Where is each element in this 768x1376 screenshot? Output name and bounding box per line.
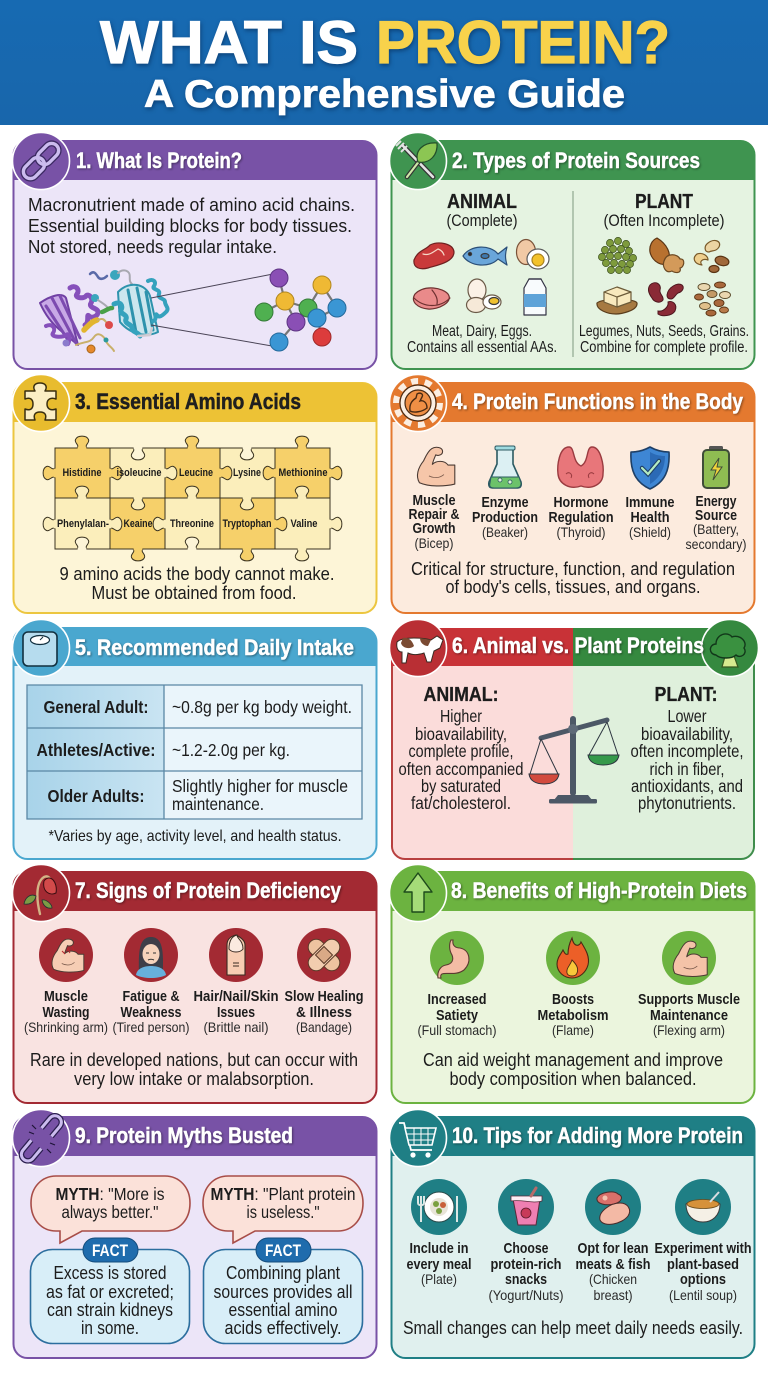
animal heading bbox=[446, 190, 518, 230]
tip: include in every meal: Include in bbox=[410, 1240, 468, 1257]
sign: fatigue: (Tired person) bbox=[112, 1019, 190, 1035]
protein ribbon illustration bbox=[40, 270, 168, 353]
sign: fatigue: Weakness bbox=[120, 1004, 182, 1021]
tip: include in every meal: every meal bbox=[406, 1256, 472, 1273]
sign: slow healing bbox=[284, 928, 364, 1035]
tip: protein-rich snacks bbox=[488, 1179, 564, 1303]
fact 2 box: sources provides all bbox=[214, 1282, 352, 1302]
benefit: supports muscle bbox=[638, 931, 740, 1038]
function: immune health bbox=[626, 447, 674, 540]
benefit: supports muscle: Maintenance bbox=[650, 1007, 728, 1024]
amino acid puzzle: Threonine bbox=[170, 518, 214, 530]
animal column: fat/cholesterol. bbox=[411, 793, 511, 813]
sign: hair nail skin: Issues bbox=[217, 1004, 255, 1021]
function: muscle repair: Muscle bbox=[412, 492, 456, 509]
tip: include in every meal bbox=[406, 1179, 472, 1287]
animal column: by saturated bbox=[421, 776, 501, 796]
tip: lean meats: Opt for lean bbox=[578, 1240, 648, 1257]
intake table bbox=[27, 685, 362, 819]
panel: 10 tips for adding more protein bbox=[390, 1110, 755, 1358]
animal caption bbox=[407, 323, 557, 356]
function: immune health: Immune bbox=[626, 494, 674, 511]
amino acid puzzle: Keaine bbox=[124, 518, 152, 530]
sign: slow healing: (Bandage) bbox=[296, 1019, 352, 1035]
icon: puzzle piece bbox=[12, 374, 70, 432]
function: muscle repair: (Bicep) bbox=[414, 535, 454, 551]
intake table: ~1.2-2.0g per kg. bbox=[172, 740, 290, 760]
panel: 3 essential amino acids bbox=[12, 374, 377, 613]
plant heading bbox=[604, 190, 724, 230]
sign: fatigue: Fatigue & bbox=[122, 988, 180, 1005]
fact 1 box: as fat or excreted; bbox=[46, 1282, 174, 1302]
function: hormone regulation: Regulation bbox=[548, 509, 614, 526]
plant column bbox=[630, 683, 744, 813]
sign: fatigue bbox=[112, 928, 190, 1035]
heading: 2. Types of Protein Sources bbox=[452, 148, 700, 173]
sign: muscle wasting bbox=[24, 928, 108, 1035]
column divider bbox=[572, 191, 574, 357]
intake table: General Adult: bbox=[44, 697, 148, 717]
animal caption: Meat, Dairy, Eggs. bbox=[432, 323, 532, 340]
intake table: Athletes/Active: bbox=[36, 740, 156, 760]
amino acid puzzle: Valine bbox=[290, 518, 318, 530]
plant heading: PLANT bbox=[635, 190, 693, 213]
myth 2 bubble bbox=[203, 1176, 363, 1243]
title: PROTEIN? bbox=[376, 9, 670, 76]
animal heading: (Complete) bbox=[446, 211, 518, 230]
icon: eggs bbox=[466, 279, 501, 312]
icon: raw meat slices bbox=[413, 288, 450, 309]
icon: milk carton bbox=[524, 279, 546, 315]
sign: muscle wasting: Wasting bbox=[42, 1004, 90, 1021]
benefit: boosts metabolism: (Flame) bbox=[552, 1022, 594, 1038]
description text: Essential building blocks for body tissues. bbox=[28, 215, 352, 236]
fact 2 box: acids effectively. bbox=[224, 1318, 342, 1338]
sign: muscle wasting: Muscle bbox=[44, 988, 88, 1005]
myth 1 bubble: MYTH: "More is bbox=[56, 1184, 165, 1204]
animal column: ANIMAL: bbox=[424, 683, 498, 706]
animal column: Higher bbox=[440, 706, 482, 726]
amino acid puzzle: Histidine bbox=[62, 467, 102, 479]
connector lines bbox=[151, 274, 273, 346]
title bbox=[100, 9, 670, 76]
title: WHAT IS bbox=[100, 9, 358, 76]
plant column: antioxidants, and bbox=[631, 776, 743, 796]
subtitle: A Comprehensive Guide bbox=[144, 73, 625, 116]
sign: slow healing: Slow Healing bbox=[284, 988, 364, 1005]
function: hormone regulation: Hormone bbox=[554, 494, 608, 511]
tip: plant-based options bbox=[654, 1179, 752, 1303]
function: immune health: (Shield) bbox=[629, 524, 671, 540]
sign: hair nail skin bbox=[194, 928, 278, 1035]
icon: tofu bbox=[597, 287, 637, 314]
benefit: supports muscle: (Flexing arm) bbox=[653, 1022, 725, 1038]
amino acid puzzle: Methionine bbox=[278, 467, 328, 479]
plant column: Lower bbox=[668, 706, 707, 726]
tip: plant-based options: Experiment with bbox=[654, 1240, 752, 1257]
icon: wilted flower bbox=[12, 864, 70, 922]
tip: plant-based options: plant-based bbox=[667, 1256, 739, 1273]
description text: Macronutrient made of amino acid chains. bbox=[28, 194, 355, 215]
panel: 2 types of protein sources bbox=[390, 132, 755, 369]
plant heading: (Often Incomplete) bbox=[604, 211, 724, 230]
intake table: maintenance. bbox=[172, 794, 264, 814]
function: enzyme production: Production bbox=[472, 509, 538, 526]
description text bbox=[28, 194, 355, 257]
function: energy source: (Battery, bbox=[693, 521, 739, 537]
sign: slow healing: & Illness bbox=[296, 1004, 352, 1021]
function: energy source bbox=[686, 446, 746, 552]
amino acid puzzle: Leucine bbox=[179, 467, 213, 479]
fact 2 box bbox=[204, 1238, 362, 1344]
heading: 1. What Is Protein? bbox=[76, 148, 242, 173]
function: immune health: Health bbox=[630, 509, 670, 526]
tip: lean meats: (Chicken bbox=[589, 1271, 637, 1287]
panel: 6 animal vs plant proteins bbox=[390, 620, 758, 859]
fact 2 box: essential amino bbox=[228, 1300, 338, 1320]
benefit: increased satiety: Satiety bbox=[436, 1007, 479, 1024]
benefit: boosts metabolism bbox=[538, 931, 608, 1038]
caption bbox=[423, 1049, 723, 1089]
amino acid molecule bbox=[255, 269, 346, 351]
footnote: *Varies by age, activity level, and health status. bbox=[48, 828, 342, 845]
icon: kidney beans bbox=[649, 283, 683, 316]
function: enzyme production: (Beaker) bbox=[482, 524, 528, 540]
sign: muscle wasting: (Shrinking arm) bbox=[24, 1019, 108, 1035]
animal column: complete profile, bbox=[408, 741, 514, 761]
myth 2 bubble: MYTH: "Plant protein bbox=[210, 1184, 356, 1204]
function: muscle repair: Repair & bbox=[408, 506, 460, 523]
fact 1 box bbox=[30, 1238, 190, 1344]
panel: 4 protein functions bbox=[390, 374, 755, 613]
heading: 9. Protein Myths Busted bbox=[75, 1123, 293, 1148]
function: energy source: secondary) bbox=[686, 536, 746, 552]
amino acid puzzle bbox=[43, 436, 342, 561]
caption bbox=[60, 563, 334, 603]
benefit: increased satiety bbox=[418, 931, 496, 1038]
icon: chain link bbox=[12, 132, 70, 190]
tip: plant-based options: options bbox=[680, 1271, 726, 1288]
plant column: phytonutrients. bbox=[638, 793, 736, 813]
icon: gear with muscle bbox=[390, 374, 446, 432]
amino acid puzzle: Tryptophan bbox=[222, 518, 272, 530]
heading: 5. Recommended Daily Intake bbox=[75, 635, 354, 660]
caption: Can aid weight management and improve bbox=[423, 1049, 723, 1070]
panel: 7 signs of protein deficiency bbox=[12, 864, 377, 1103]
plant caption bbox=[579, 323, 749, 356]
myth 1 bubble: always better." bbox=[62, 1202, 158, 1222]
caption: Critical for structure, function, and regulation bbox=[411, 558, 735, 579]
icon: broccoli bbox=[702, 620, 758, 676]
intake table: Older Adults: bbox=[48, 786, 144, 806]
caption: of body's cells, tissues, and organs. bbox=[446, 576, 700, 597]
caption: Rare in developed nations, but can occur with bbox=[30, 1049, 358, 1070]
amino acid puzzle: isoleucine bbox=[116, 467, 162, 479]
fact 2 box: FACT bbox=[265, 1241, 301, 1260]
fact 1 box: Excess is stored bbox=[54, 1263, 166, 1283]
myth 1 bubble bbox=[31, 1176, 190, 1243]
function: muscle repair: Growth bbox=[412, 520, 456, 537]
function: enzyme production bbox=[472, 446, 538, 540]
benefit: increased satiety: Increased bbox=[428, 991, 486, 1008]
benefit: boosts metabolism: Metabolism bbox=[538, 1007, 608, 1024]
benefit: increased satiety: (Full stomach) bbox=[418, 1022, 496, 1038]
amino acid puzzle: Lysine bbox=[233, 467, 261, 479]
fact 1 box: can strain kidneys bbox=[47, 1300, 173, 1320]
icon: nuts bbox=[650, 238, 684, 273]
heading: 3. Essential Amino Acids bbox=[75, 389, 301, 414]
icon: cashews and peanuts bbox=[694, 240, 730, 272]
sign: hair nail skin: (Brittle nail) bbox=[204, 1019, 268, 1035]
intake table: ~0.8g per kg body weight. bbox=[172, 697, 352, 717]
function: muscle repair bbox=[408, 447, 460, 551]
tip: include in every meal: (Plate) bbox=[421, 1271, 457, 1287]
tip: lean meats: breast) bbox=[594, 1287, 632, 1303]
fact 1 box: FACT bbox=[92, 1241, 128, 1260]
amino acid puzzle: Phenylalan- bbox=[57, 518, 109, 530]
tip: lean meats: meats & fish bbox=[576, 1256, 650, 1273]
function: hormone regulation bbox=[548, 447, 614, 540]
fact 1 box: in some. bbox=[81, 1318, 139, 1338]
caption: very low intake or malabsorption. bbox=[74, 1068, 314, 1089]
icon: broken chain bbox=[12, 1110, 70, 1166]
tip: protein-rich snacks: protein-rich bbox=[490, 1256, 562, 1273]
plant column: often incomplete, bbox=[630, 741, 744, 761]
plant column: rich in fiber, bbox=[650, 759, 724, 779]
plant column: bioavailability, bbox=[641, 724, 733, 744]
panel: 9 protein myths busted bbox=[12, 1110, 377, 1358]
benefit: supports muscle: Supports Muscle bbox=[638, 991, 740, 1008]
function: energy source: Source bbox=[695, 507, 737, 524]
function: energy source: Energy bbox=[696, 493, 737, 510]
icon: cow bbox=[390, 620, 446, 676]
icon: mixed seeds bbox=[694, 282, 730, 316]
caption: 9 amino acids the body cannot make. bbox=[60, 563, 334, 584]
caption bbox=[411, 558, 735, 597]
sign: hair nail skin: Hair/Nail/Skin bbox=[194, 988, 278, 1005]
animal column: often accompanied bbox=[398, 759, 524, 779]
function: enzyme production: Enzyme bbox=[482, 494, 528, 511]
icon: up arrow bbox=[390, 864, 446, 922]
heading: 6. Animal vs. Plant Proteins bbox=[452, 633, 704, 658]
animal caption: Contains all essential AAs. bbox=[407, 339, 557, 356]
icon: fork and leaf bbox=[390, 132, 446, 190]
tip: protein-rich snacks: Choose bbox=[504, 1240, 548, 1257]
icon: fish bbox=[463, 247, 507, 265]
panel: 1 what is protein bbox=[12, 132, 377, 369]
animal column: bioavailability, bbox=[415, 724, 507, 744]
myth 2 bubble: is useless." bbox=[246, 1202, 320, 1222]
icon: steak bbox=[414, 243, 454, 269]
icon: balance scale bbox=[529, 716, 619, 804]
icon: legumes bbox=[598, 237, 637, 274]
plant column: PLANT: bbox=[654, 683, 718, 706]
animal column bbox=[398, 683, 524, 813]
description text: Not stored, needs regular intake. bbox=[28, 236, 277, 257]
heading: 7. Signs of Protein Deficiency bbox=[75, 878, 342, 903]
tip: lean meats bbox=[576, 1179, 650, 1303]
tip: protein-rich snacks: snacks bbox=[505, 1271, 547, 1288]
caption bbox=[30, 1049, 358, 1089]
tip: plant-based options: (Lentil soup) bbox=[669, 1287, 737, 1303]
icon: shopping cart bbox=[390, 1110, 446, 1166]
caption: Must be obtained from food. bbox=[92, 582, 296, 603]
header banner bbox=[0, 0, 768, 125]
animal heading: ANIMAL bbox=[447, 190, 517, 213]
caption: body composition when balanced. bbox=[450, 1068, 696, 1089]
tip: protein-rich snacks: (Yogurt/Nuts) bbox=[488, 1287, 564, 1303]
panel: 5 recommended daily intake bbox=[12, 620, 377, 859]
fact 2 box: Combining plant bbox=[226, 1263, 340, 1283]
icon: weighing scale bbox=[12, 620, 70, 676]
icon: boiled egg bbox=[516, 240, 549, 269]
intake table: Slightly higher for muscle bbox=[172, 776, 348, 796]
panel: 8 benefits of high-protein diets bbox=[390, 864, 755, 1103]
function: hormone regulation: (Thyroid) bbox=[556, 524, 606, 540]
benefit: boosts metabolism: Boosts bbox=[552, 991, 594, 1008]
